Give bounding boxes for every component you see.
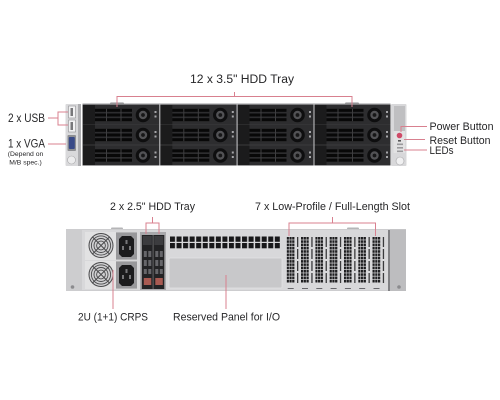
rear handles bbox=[111, 228, 359, 230]
front right ear with buttons bbox=[391, 104, 406, 166]
power supplies bbox=[85, 232, 137, 289]
label: LEDs: LEDs bbox=[430, 145, 454, 157]
label: 12 x 3.5" HDD Tray: 12 x 3.5" HDD Tray bbox=[190, 74, 294, 86]
top handles bbox=[110, 102, 359, 104]
icon: front right knob bbox=[396, 157, 404, 165]
rear chassis bbox=[66, 228, 406, 291]
label: Reset Button: Reset Button bbox=[430, 135, 490, 147]
icon: USB ports bbox=[68, 106, 76, 132]
label: Reserved Panel for I/O: Reserved Panel for I/O bbox=[173, 312, 280, 324]
label: VGA note: (Depend on bbox=[8, 151, 43, 158]
drive bay grid bbox=[82, 104, 390, 166]
PCIe slots bbox=[287, 237, 384, 289]
front left ear with ports bbox=[66, 104, 81, 166]
icon: reset button and LEDs bbox=[397, 140, 403, 152]
label: 2 x 2.5" HDD Tray: 2 x 2.5" HDD Tray bbox=[110, 201, 195, 213]
label: VGA note: M/B spec.) bbox=[9, 160, 42, 166]
icon: power button bbox=[397, 133, 402, 138]
label: Power Button: Power Button bbox=[430, 121, 494, 133]
callout lines bbox=[48, 92, 427, 309]
vent holes bbox=[170, 236, 281, 248]
label: 7 x Low-Profile / Full-Length Slot: 7 x Low-Profile / Full-Length Slot bbox=[255, 201, 410, 213]
label: 2 x USB: 2 x USB bbox=[8, 113, 45, 125]
label: 1 x VGA: 1 x VGA bbox=[8, 138, 45, 150]
icon: front left knob bbox=[68, 156, 76, 164]
reserved I/O panel bbox=[169, 258, 282, 288]
rear 2.5 inch drive trays bbox=[140, 232, 166, 290]
front chassis bbox=[66, 102, 406, 166]
icon: VGA port bbox=[68, 135, 76, 151]
label: 2U (1+1) CRPS: 2U (1+1) CRPS bbox=[78, 312, 148, 324]
